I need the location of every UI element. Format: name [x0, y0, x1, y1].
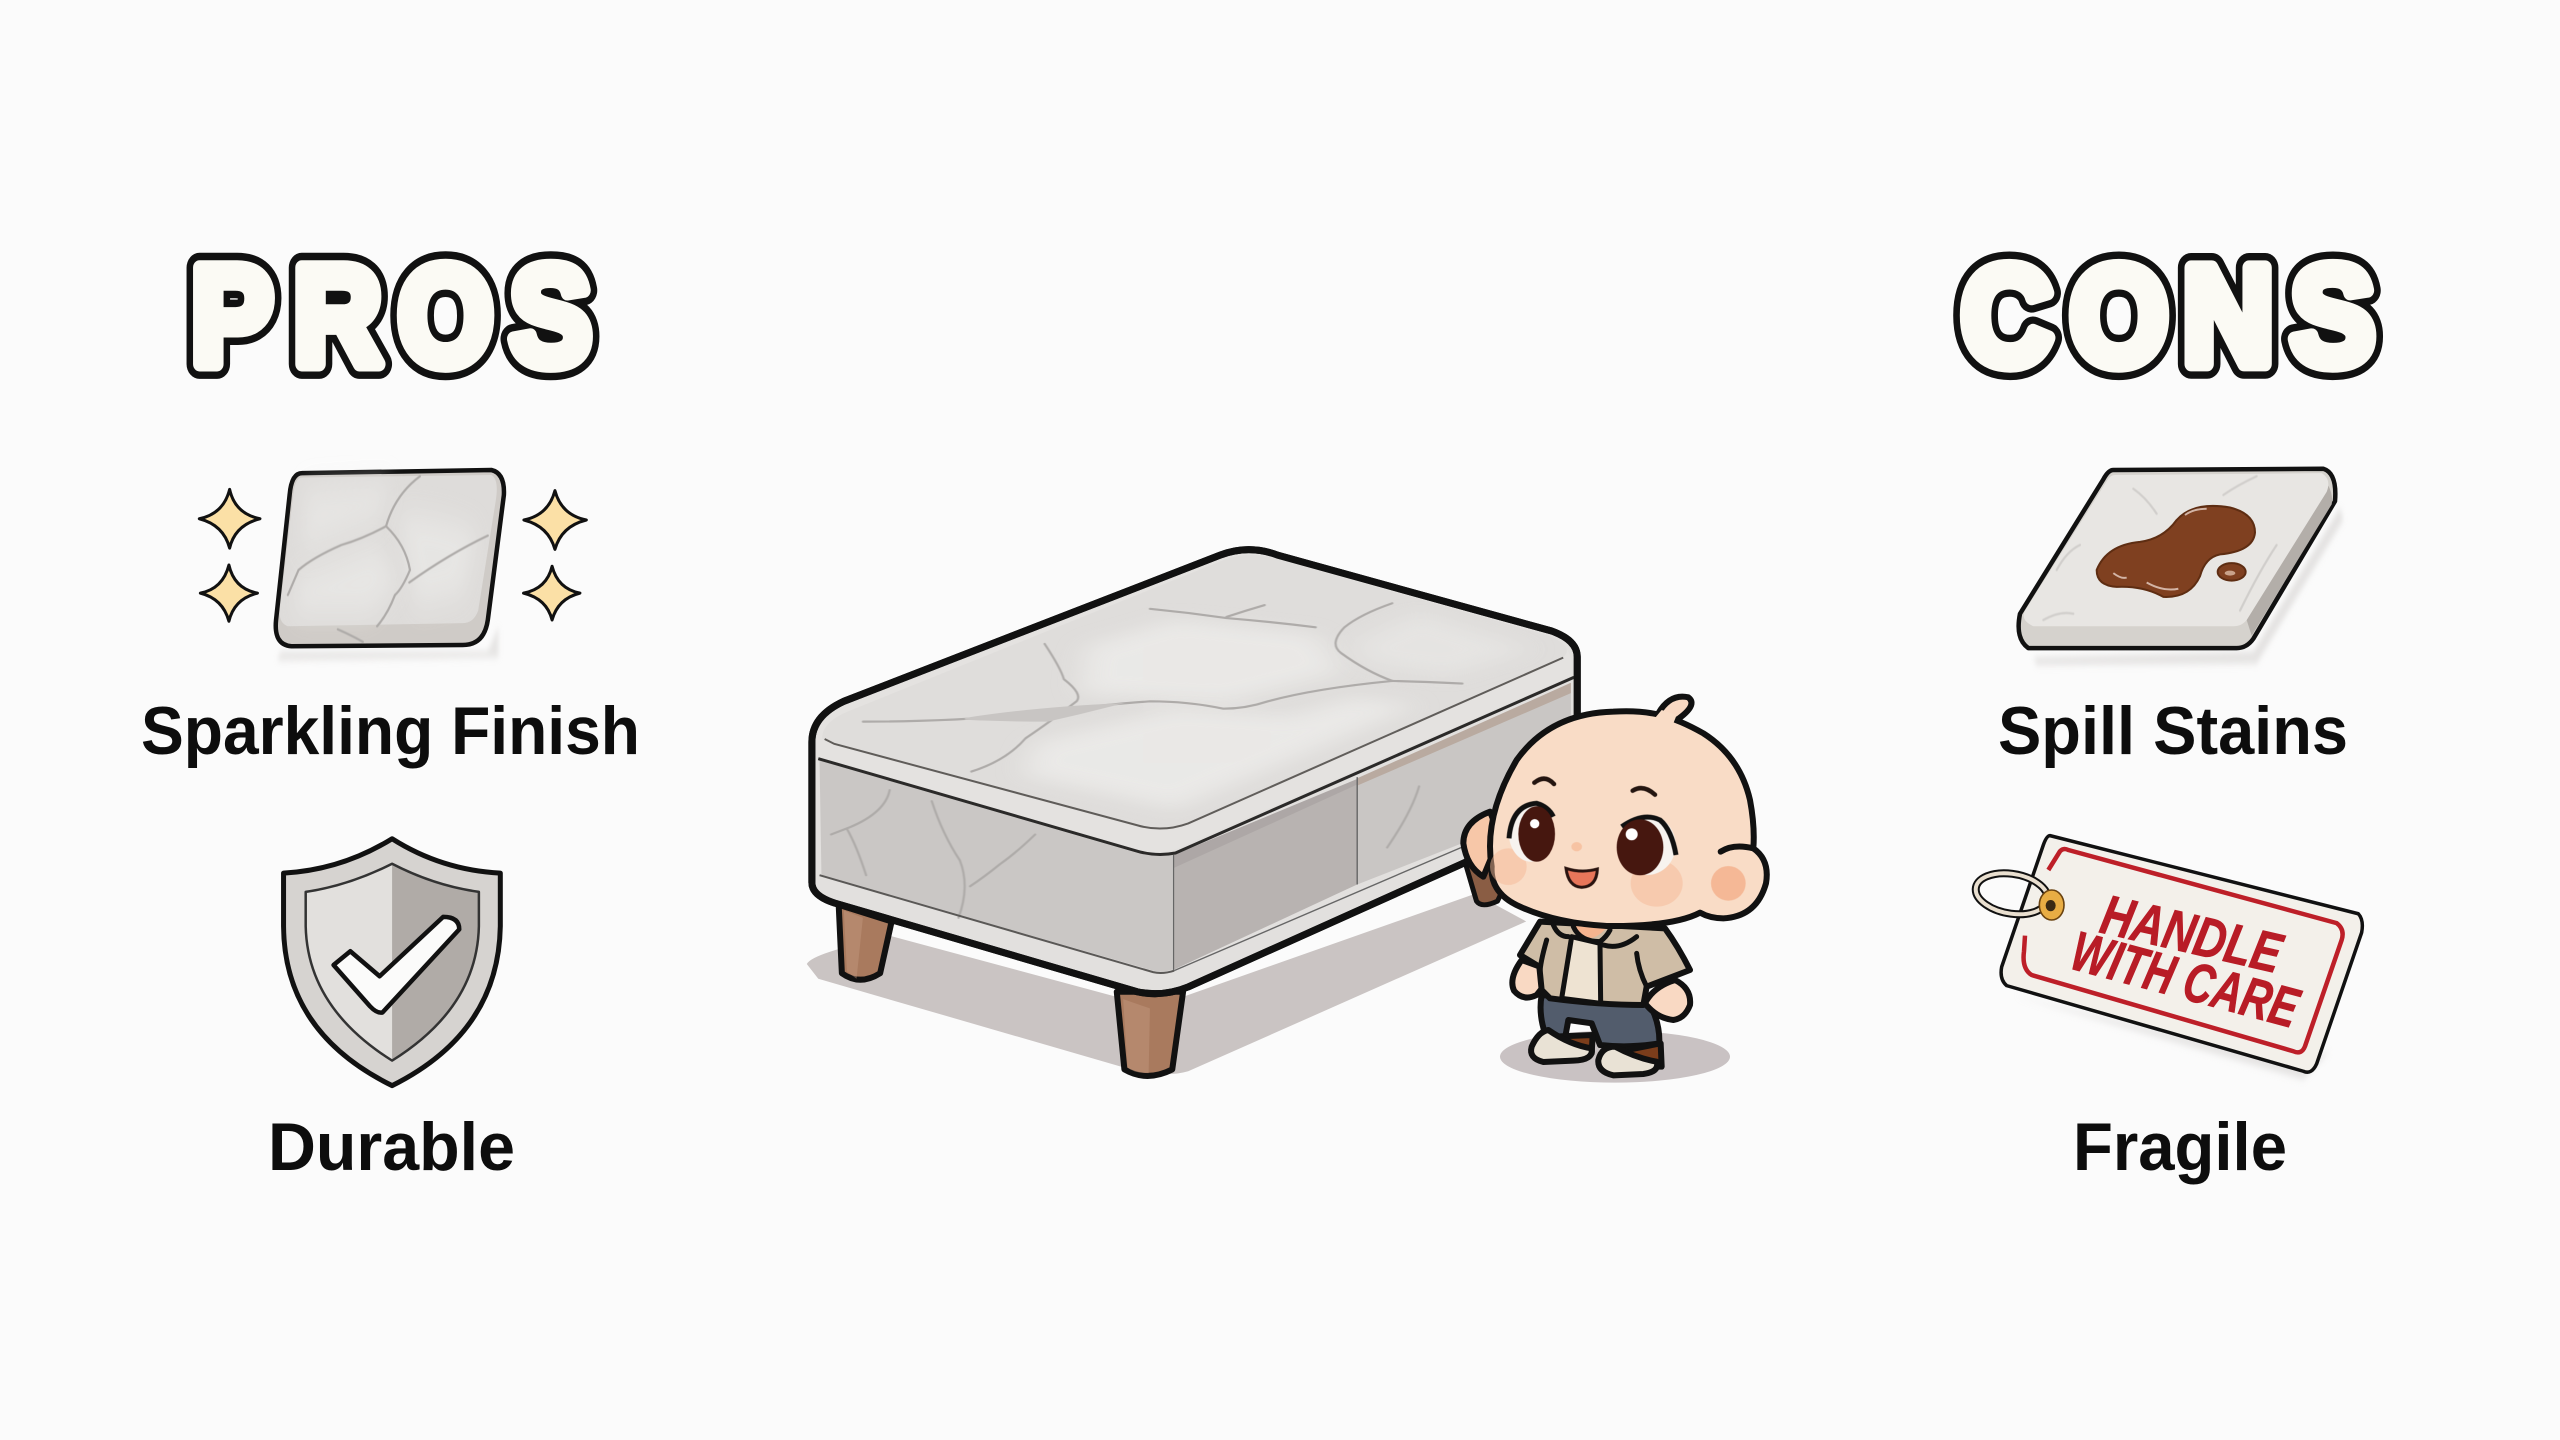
- panel: cons column: [1961, 238, 2375, 1185]
- icon: marble slab with spill stain: [2019, 469, 2343, 665]
- back leg: [1466, 864, 1513, 905]
- illustration: marble coffee table: [807, 550, 1577, 1076]
- jacket: [1520, 922, 1690, 1005]
- hand right: [1645, 980, 1690, 1020]
- icon: handle with care tag: [1975, 836, 2362, 1079]
- tan strip: [1357, 683, 1571, 786]
- marble top slab edge: [817, 554, 1572, 852]
- heading: CONS: CONS: [1961, 238, 2375, 394]
- ground shadow: [1500, 1031, 1730, 1083]
- character: baby figure: [1463, 697, 1767, 1083]
- label: Durable: Durable: [268, 1109, 515, 1185]
- left ear: [1463, 812, 1500, 877]
- panel: pros column: [141, 237, 640, 1185]
- red border: [2024, 849, 2343, 1052]
- base band line: [820, 875, 1174, 973]
- left face: [820, 760, 1172, 972]
- mouth: [1566, 868, 1597, 887]
- spill stain: [2097, 506, 2255, 597]
- icon: polished marble slab with sparkles: [199, 470, 586, 661]
- heading: PROS: PROS: [191, 237, 591, 394]
- brows: [1534, 779, 1655, 795]
- shoes: [1531, 1030, 1662, 1075]
- right face panel two: [1357, 690, 1571, 884]
- tag body: [2001, 836, 2362, 1072]
- marble light patches: [1033, 624, 1386, 802]
- left leg: [839, 905, 892, 980]
- icon: sparkles: [199, 489, 586, 621]
- hair tuft: [1658, 697, 1691, 720]
- eyelet: [2039, 890, 2064, 920]
- string loop: [1975, 869, 2048, 918]
- hand left: [1512, 960, 1543, 998]
- cheeks and ear blush: [1490, 848, 1683, 907]
- label: Spill Stains: Spill Stains: [1998, 693, 2348, 769]
- table floor shadow: [807, 894, 1526, 1074]
- pants: [1541, 995, 1659, 1046]
- label: Sparkling Finish: Sparkling Finish: [141, 693, 640, 769]
- icon: shield with check mark: [284, 839, 500, 1086]
- marble veins: [863, 603, 1462, 772]
- body and slab separating line: [818, 677, 1574, 854]
- right face panel one: [1174, 779, 1357, 970]
- table body silhouette: [812, 550, 1577, 994]
- eyes: [1509, 803, 1676, 875]
- tag text: WITH CARE: WITH CARE: [2065, 919, 2306, 1040]
- front leg: [1117, 992, 1183, 1076]
- heading: CONS: CONS: [1961, 238, 2375, 394]
- table outline redraw: [812, 550, 1577, 994]
- head: [1490, 711, 1767, 926]
- marble top surface: [822, 555, 1567, 829]
- nose: [1571, 842, 1582, 851]
- heading: PROS: PROS: [191, 237, 591, 394]
- shirt: [1562, 937, 1601, 1003]
- tag text: HANDLE: HANDLE: [2095, 882, 2289, 985]
- label: Fragile: Fragile: [2073, 1109, 2287, 1185]
